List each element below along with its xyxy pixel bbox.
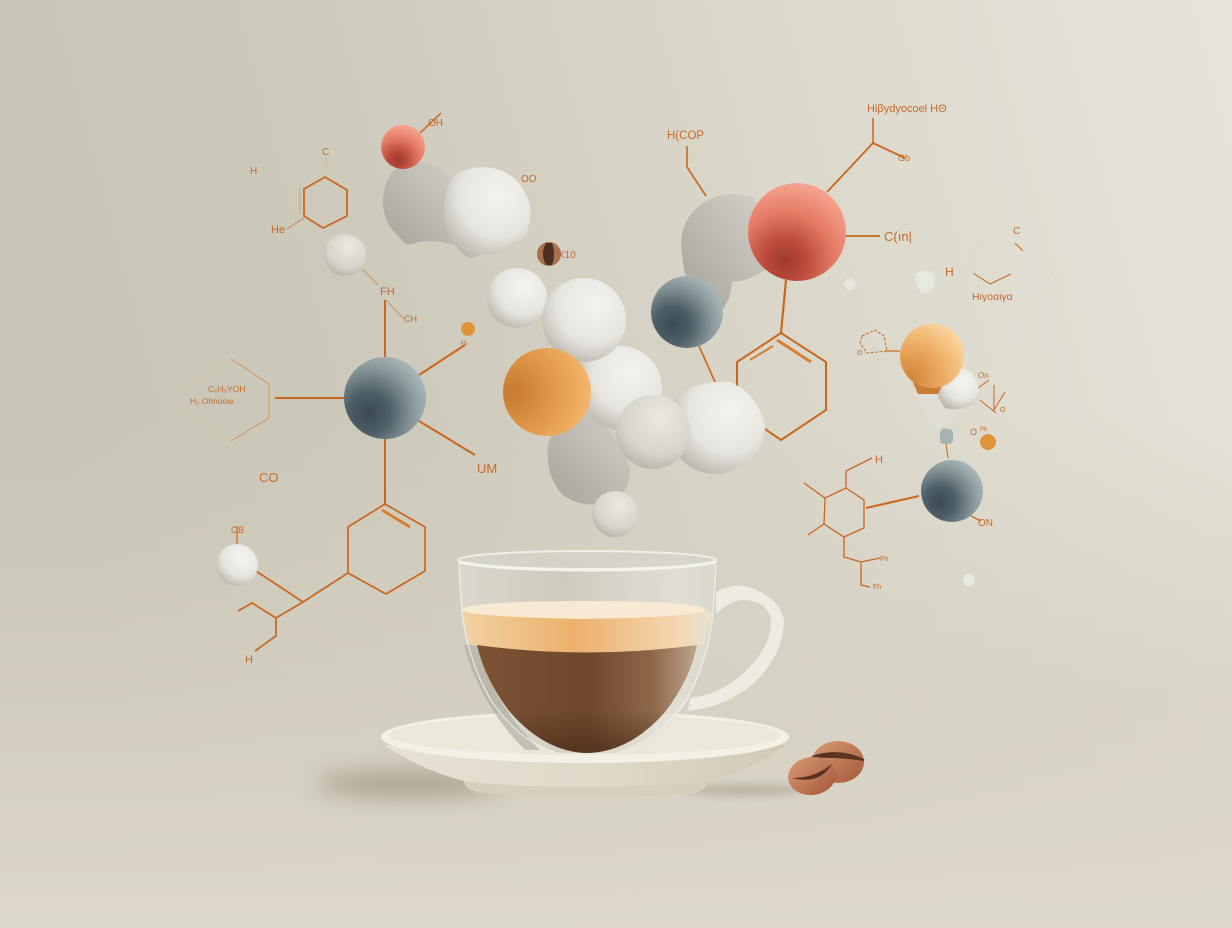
atom: small bottom sphere	[592, 491, 638, 537]
chemical labels: On	[978, 371, 989, 380]
saucer rim	[381, 711, 789, 763]
chemical labels: Hiβydyocoel HΘ	[867, 103, 947, 115]
atom: gray lower blob	[548, 412, 630, 504]
faint specks	[844, 271, 975, 586]
molecule diagram: central right hexagon	[737, 333, 826, 440]
chemical labels: Ph	[980, 427, 987, 433]
chemical labels: OB	[231, 525, 244, 535]
chemical labels: OH	[428, 118, 443, 129]
chemical labels: H	[245, 654, 253, 666]
central molecule cluster	[503, 278, 765, 537]
atom: pale lower blob	[917, 392, 957, 428]
atom: small red sphere	[381, 125, 425, 169]
atom: orange right base	[912, 380, 942, 394]
glass lower left wedge	[464, 645, 540, 750]
atom: coral sphere	[748, 183, 846, 281]
chemical labels	[190, 103, 1020, 666]
atom: beige sphere	[616, 395, 690, 469]
chemical labels: C	[322, 147, 329, 158]
molecule diagram: faint hexagon with label	[191, 359, 269, 441]
chemical labels: UM	[477, 461, 497, 476]
molecule diagram: upper left fragment	[275, 113, 475, 504]
chemical labels: H₂ Ohnoow	[190, 396, 234, 406]
chemical labels: Fh	[880, 556, 888, 563]
coffee	[477, 645, 697, 753]
chemical labels: C₆H₅YOH	[208, 384, 246, 394]
chemical labels: Fh	[873, 584, 881, 591]
saucer underside	[384, 745, 786, 787]
cup glass body	[458, 560, 717, 753]
icon: small coffee bean	[537, 242, 561, 266]
atom: white sphere top	[542, 278, 626, 362]
cup handle	[688, 586, 784, 711]
atom: small orange dot	[461, 322, 475, 336]
chemical labels: Gb	[898, 153, 910, 163]
cup shadow	[315, 772, 805, 796]
molecule diagram: small ring right	[860, 330, 887, 353]
foam band	[461, 601, 712, 652]
molecule diagram: lower right structure	[804, 351, 1005, 587]
atom: small gray square	[940, 429, 953, 444]
chemical labels: H	[875, 454, 883, 466]
connector stem	[497, 240, 540, 272]
chemical labels: H₂	[461, 340, 469, 347]
coffee cup	[458, 551, 784, 753]
atom cluster: upper white blob	[444, 167, 530, 258]
atom: slate sphere right	[921, 460, 983, 522]
molecule diagram: faint right hexagon	[971, 243, 1060, 292]
cream top	[461, 601, 706, 619]
upper right atom group	[651, 183, 846, 348]
chemical labels: O	[1000, 407, 1006, 414]
chemical labels: H(COP	[667, 130, 704, 142]
atom: white right blob	[937, 368, 979, 409]
right atoms	[900, 324, 996, 522]
molecule diagram: lower left hexagon chain	[237, 504, 425, 651]
chemical labels: Hιγoαιγα	[972, 291, 1013, 303]
atom: small orange dot right	[980, 434, 996, 450]
cup rim	[458, 551, 716, 570]
chemical labels: H	[250, 166, 257, 177]
atom: white sphere lower left	[216, 544, 258, 586]
chemical labels: O	[857, 350, 863, 357]
chemical labels: C	[1013, 226, 1020, 237]
atom: orange right sphere	[900, 324, 964, 388]
atom: gray blob	[681, 194, 765, 310]
saucer	[381, 711, 789, 798]
saucer foot	[462, 776, 710, 798]
atom: large slate sphere	[344, 357, 426, 439]
atom cluster: upper gray blob	[383, 162, 466, 250]
chemical labels: ON	[978, 518, 993, 529]
molecule diagram: upper right bonds	[687, 118, 905, 382]
chemical labels: He	[271, 224, 285, 236]
atom: slate sphere	[651, 276, 723, 348]
coffee beans	[786, 741, 864, 798]
chemical labels: O	[970, 427, 977, 437]
chemical labels: CO	[259, 470, 278, 485]
atom: faint white sphere	[324, 234, 366, 276]
atom: white center sphere	[578, 346, 662, 430]
saucer plate	[389, 715, 781, 755]
chemical labels: FH	[380, 286, 395, 298]
atom: orange sphere	[503, 348, 591, 436]
atom: white right sphere	[673, 382, 765, 474]
chemical labels: C(ın|	[884, 229, 912, 244]
chemical labels: CH	[404, 314, 417, 324]
chemical labels: H	[945, 265, 954, 279]
chemical labels: OO	[521, 174, 537, 185]
glass edge highlight	[459, 565, 716, 752]
atom: white sphere	[487, 268, 547, 328]
chemical labels: X10	[558, 250, 576, 261]
